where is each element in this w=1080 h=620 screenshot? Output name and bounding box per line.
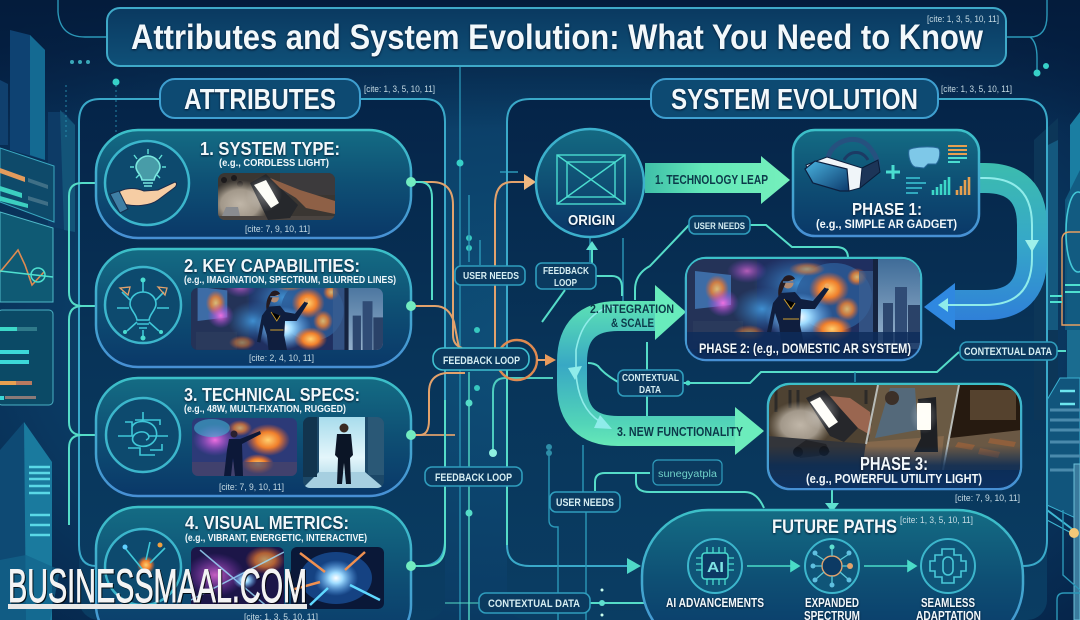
card 3: technical specs: [96, 378, 416, 496]
card 1: system type: 1. SYSTEM TYPE:: [200, 138, 340, 159]
image: purple light streaks: [191, 547, 284, 604]
arrow: AI to spectrum: [747, 561, 799, 571]
phase 1 card: (e.g., SIMPLE AR GADGET): [816, 217, 957, 231]
arrow: technology leap: 1. TECHNOLOGY LEAP: [655, 173, 768, 187]
icon: seamless adaptation: [921, 539, 975, 593]
icon: hand and lightbulb: [105, 141, 189, 225]
panel: future paths: [cite: 1, 3, 5, 10, 11]: [900, 515, 973, 525]
label: user needs top: [689, 216, 750, 234]
card 4: visual metrics: [96, 507, 416, 620]
arrow: orange to integration: [545, 354, 556, 366]
right cityscape: [1034, 112, 1080, 620]
image: woman with AR scene: [191, 288, 383, 350]
label: feedback loop lower: [425, 467, 522, 486]
label: feedback loop upper: FEEDBACK: [543, 266, 590, 277]
arrow: big curve phase 1 to phase 2: [924, 178, 1039, 330]
icon: plus: [886, 165, 900, 179]
label: user needs lower: [550, 492, 620, 512]
card 1: system type: (e.g., CORDLESS LIGHT): [219, 158, 329, 169]
phase 3 card: PHASE 3:: [860, 454, 928, 474]
image: woman with AR scene, large: [687, 255, 920, 360]
card 4: visual metrics: (e.g., VIBRANT, ENERGETIC, INTERACTIVE): [185, 533, 367, 544]
icon: origin frame: [557, 155, 625, 204]
label: feedback loop lower: FEEDBACK LOOP: [435, 472, 512, 484]
attributes outline: [79, 99, 445, 566]
arrow: integration and new functionality: & SCALE: [611, 316, 654, 330]
card 4: visual metrics: 4. VISUAL METRICS:: [185, 512, 349, 533]
label: feedback loop upper: [536, 263, 596, 289]
label: user needs top: USER NEEDS: [694, 221, 745, 232]
arrow: integration and new functionality: 3. NEW FUNCTIONALITY: [617, 424, 743, 439]
icon: circuit brain: [106, 398, 180, 472]
label: contextual data middle: DATA: [639, 385, 661, 396]
image: utility light workshop: [768, 385, 1021, 489]
heading: system evolution: SYSTEM EVOLUTION: [671, 84, 918, 116]
label: contextual data right: CONTEXTUAL DATA: [964, 346, 1052, 358]
card 3: technical specs: 3. TECHNICAL SPECS:: [184, 384, 360, 405]
panel: future paths: EXPANDED: [805, 596, 859, 610]
phase 2 card: [686, 255, 921, 360]
label: garbled note: sunegyatpla: [658, 469, 717, 480]
phase 1 card: [793, 130, 979, 236]
phase 2 card: PHASE 2: (e.g., DOMESTIC AR SYSTEM): [699, 340, 911, 356]
card 3: technical specs: (e.g., 48W, MULTI-FIXATION, RUGGED): [184, 404, 346, 415]
arrow: feedback to origin: [586, 241, 598, 250]
panel: future paths: [642, 510, 1023, 620]
watermark: [8, 559, 307, 612]
arrow: spectrum to adaptation: [864, 561, 916, 571]
label: user needs left: USER NEEDS: [463, 271, 519, 282]
title bar: Attributes and System Evolution: What You Need to Know: [131, 18, 984, 57]
label: user needs lower: USER NEEDS: [556, 497, 614, 509]
title bar: [107, 8, 1006, 66]
arrow: orange to origin: [524, 174, 536, 190]
panel: future paths: AI ADVANCEMENTS: [666, 596, 764, 610]
arrow: technology leap: [645, 156, 790, 204]
phase 3 card: (e.g., POWERFUL UTILITY LIGHT): [806, 471, 982, 486]
image: woman in colourful room: [192, 418, 297, 476]
panel interior: attributes: [79, 99, 445, 620]
title bar: [cite: 1, 3, 5, 10, 11]: [927, 14, 999, 24]
arrow: phase 3 to future paths: [825, 503, 839, 512]
origin circle: [536, 129, 644, 237]
citation: attributes: [cite: 1, 3, 5, 10, 11]: [364, 84, 435, 94]
panel interior: system evolution: [507, 99, 1047, 620]
phase 3 card: [768, 384, 1021, 489]
watermark: BUSINESSMAAL.COM: [8, 559, 307, 612]
card 1: system type: [cite: 7, 9, 10, 11]: [245, 224, 310, 234]
image: cordless light: [218, 173, 335, 220]
icon: expanded spectrum: [805, 539, 859, 593]
image: blue energy burst: [291, 547, 384, 609]
citation: system evolution: [cite: 1, 3, 5, 10, 11]: [941, 84, 1012, 94]
icon: report and charts: [906, 146, 969, 195]
card 2: key capabilities: [cite: 2, 4, 10, 11]: [249, 353, 314, 363]
icon: VR headset: [805, 139, 880, 191]
panel: future paths: SEAMLESS: [921, 596, 975, 610]
label: contextual data bottom: [479, 593, 590, 613]
label: feedback loop centre: FEEDBACK LOOP: [443, 355, 520, 367]
label: contextual data right: [960, 342, 1057, 360]
origin circle: ORIGIN: [568, 212, 615, 229]
left cityscape: [0, 30, 75, 620]
label: contextual data middle: CONTEXTUAL: [622, 373, 679, 384]
card 3: technical specs: [cite: 7, 9, 10, 11]: [219, 482, 284, 492]
card 1: system type: [96, 130, 416, 238]
label: user needs left: [455, 266, 525, 285]
heading: attributes: ATTRIBUTES: [184, 84, 336, 116]
label: feedback loop upper: LOOP: [554, 278, 577, 289]
label: contextual data bottom: CONTEXTUAL DATA: [488, 598, 580, 610]
card 2: key capabilities: (e.g., IMAGINATION, SPECTRUM, BLURRED LINES): [184, 275, 396, 286]
phase 1 card: PHASE 1:: [852, 199, 922, 219]
arrow: integration and new functionality: [568, 285, 764, 455]
mint left bus: [69, 183, 96, 525]
icon: lightbulb with branches: [105, 267, 181, 343]
card 2: key capabilities: [96, 249, 416, 367]
system evolution outline: [507, 99, 1047, 566]
icon: AI chip: [688, 539, 742, 593]
icon: spark burst: [105, 529, 181, 605]
label: garbled note: [653, 460, 722, 485]
label: feedback loop centre: [433, 348, 529, 370]
card 2: key capabilities: 2. KEY CAPABILITIES:: [184, 255, 360, 276]
arrow: integration and new functionality: 2. INTEGRATION: [590, 302, 674, 316]
citation: phase 3: [cite: 7, 9, 10, 11]: [955, 493, 1020, 503]
label: contextual data middle: [618, 370, 683, 396]
image: woman at bright doorway: [303, 417, 384, 488]
icon: AI chip: AI: [707, 559, 724, 576]
panel: future paths: FUTURE PATHS: [772, 517, 897, 538]
icon: small viewer: [909, 147, 940, 168]
